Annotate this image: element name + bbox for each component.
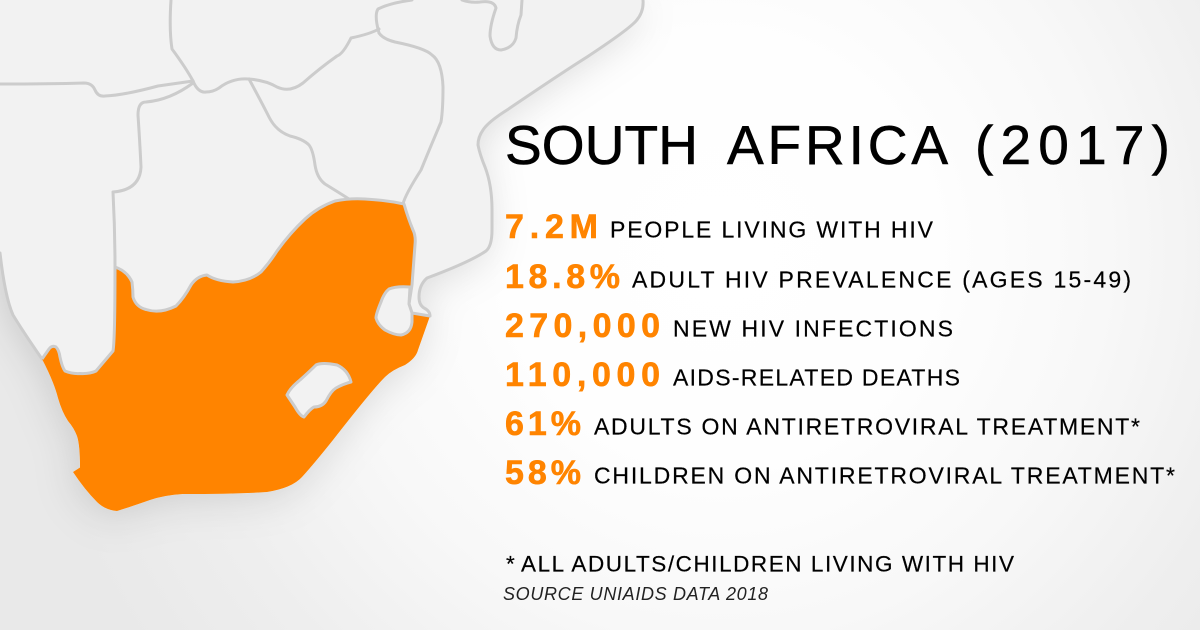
neighbouring country borders (0, 0, 643, 359)
stat: deaths (505, 356, 960, 394)
Eswatini (376, 287, 412, 335)
title: AFRICA (727, 114, 948, 176)
footnote: * (506, 552, 515, 576)
South Africa northern border (42, 199, 430, 374)
stat: deaths: 110,000 (505, 356, 660, 394)
stat: children on treatment (505, 454, 1175, 492)
stat: adults on treatment: 61% (505, 405, 581, 443)
stat: adults on treatment: ADULTS ON ANTIRETROVIRAL TREATMENT* (594, 414, 1140, 440)
stat: adult prevalence: ADULT HIV PREVALENCE (AGES 15-49) (632, 266, 1131, 292)
stat: deaths: AIDS-RELATED DEATHS (673, 364, 960, 390)
stat: new infections: NEW HIV INFECTIONS (673, 316, 953, 342)
map of southern Africa (0, 0, 643, 511)
stat: people living with HIV: 7.2M (505, 208, 598, 246)
land mass (0, 0, 643, 511)
South Africa (42, 199, 430, 511)
title: SOUTH (505, 114, 698, 176)
footnote: ALL ADULTS/CHILDREN LIVING WITH HIV (521, 552, 1014, 576)
stat: people living with HIV: PEOPLE LIVING WITH HIV (610, 216, 934, 242)
stat: new infections (505, 307, 953, 345)
stat: people living with HIV (505, 208, 934, 246)
stat: children on treatment: CHILDREN ON ANTIRETROVIRAL TREATMENT* (594, 462, 1175, 488)
stat: new infections: 270,000 (505, 307, 660, 345)
title: (2017) (975, 114, 1170, 176)
source: SOURCE UNIAIDS DATA 2018 (503, 584, 768, 604)
stat: children on treatment: 58% (505, 454, 581, 492)
Lesotho (287, 364, 351, 417)
stat: adult prevalence: 18.8% (505, 258, 620, 296)
stat: adult prevalence (505, 258, 1131, 296)
stat: adults on treatment (505, 405, 1140, 443)
stats list (505, 208, 1175, 492)
